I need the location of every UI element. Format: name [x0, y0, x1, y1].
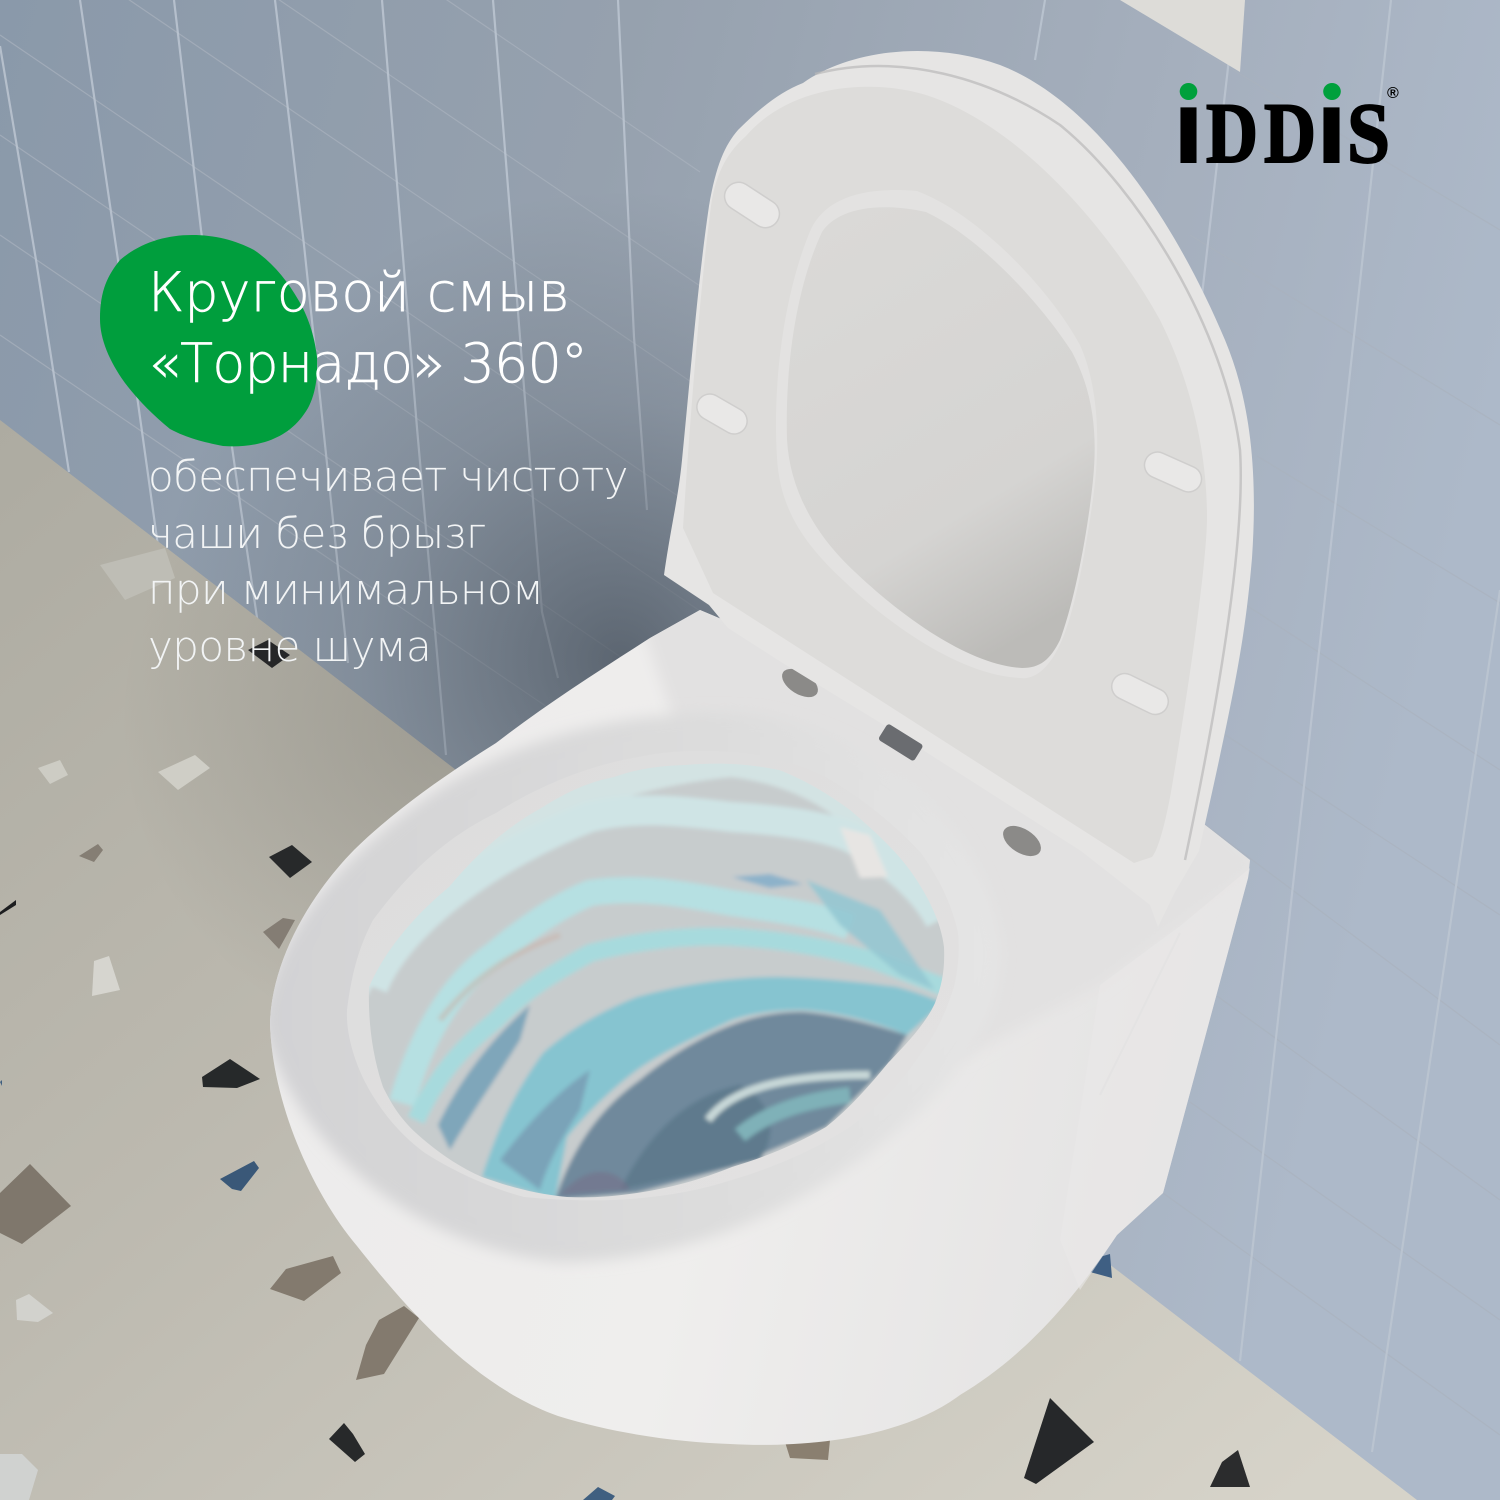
heading	[148, 261, 587, 395]
rear ridge of the side	[1100, 933, 1180, 1095]
registered mark: ®	[1387, 85, 1399, 102]
description text: уровне шума	[148, 622, 431, 670]
lid bumpers	[692, 177, 1206, 719]
terrazzo chips	[0, 548, 1250, 1500]
shadow cast on wall	[100, 180, 1100, 1180]
logo wordmark: D	[1264, 85, 1316, 181]
wall panel at top	[1120, 0, 1245, 72]
floor	[0, 420, 1417, 1500]
lid inner face	[683, 87, 1207, 863]
logo wordmark: S	[1347, 85, 1390, 181]
lid groove	[815, 66, 1241, 860]
logo wordmark: D	[1206, 85, 1258, 181]
logo wordmark	[1173, 85, 1390, 181]
seat lip	[776, 190, 1097, 678]
side face of the tank	[1060, 868, 1250, 1290]
description text: обеспечивает чистоту	[148, 452, 628, 501]
green blob	[100, 235, 317, 446]
swirling water	[369, 764, 944, 1198]
toilet body	[262, 600, 1255, 1445]
logo green dots	[1180, 83, 1341, 100]
hinge chrome fittings	[777, 663, 1046, 862]
heading: Круговой смыв	[148, 261, 570, 324]
logo	[1173, 83, 1399, 181]
dark hinge clip	[878, 723, 924, 762]
logo wordmark: I	[1316, 91, 1347, 181]
rim of the bowl	[270, 715, 923, 1264]
heading: «Торнадо» 360°	[148, 332, 587, 395]
logo wordmark: I	[1173, 91, 1204, 181]
toilet lid open	[664, 51, 1254, 927]
deck under the lid	[644, 610, 1232, 854]
description text: чаши без брызг	[148, 508, 486, 558]
seat recess	[787, 207, 1095, 668]
shadow on floor	[221, 612, 455, 908]
description text	[148, 452, 628, 670]
description text: при минимальном	[148, 565, 543, 614]
bowl inner lip	[347, 751, 959, 1200]
